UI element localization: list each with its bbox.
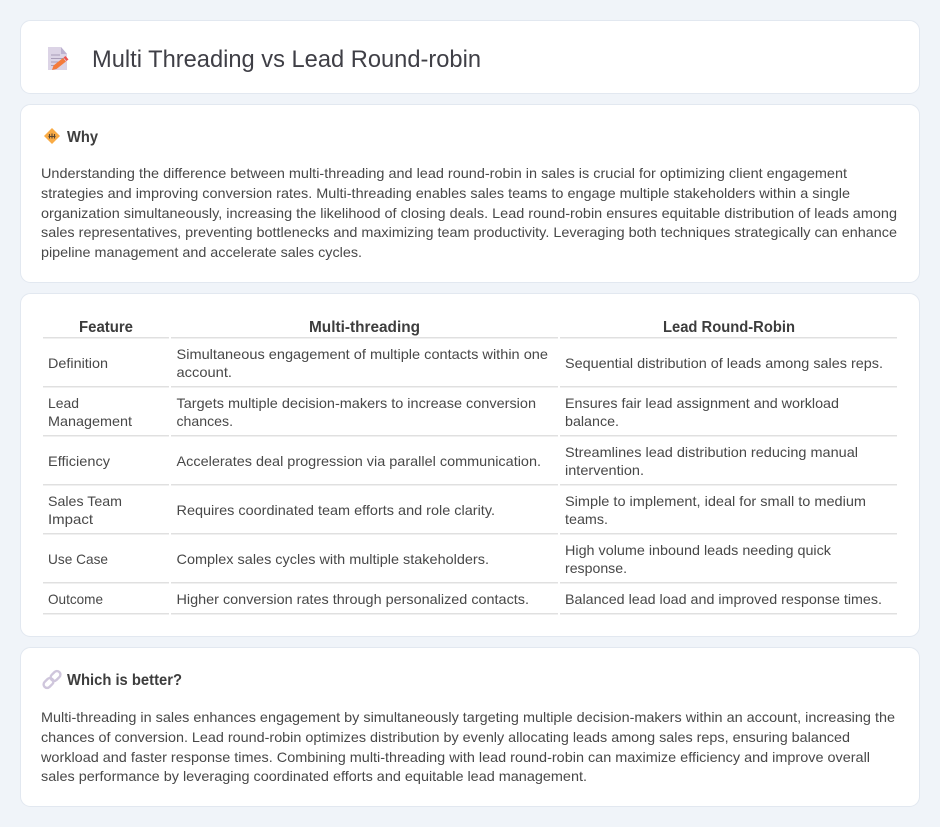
row: lead management: Targets multiple decision-makers to increase conversion <box>176 395 536 411</box>
table header row <box>79 319 795 336</box>
text block: which is better paragraph <box>40 709 895 784</box>
table header row: Lead Round-Robin <box>663 319 795 336</box>
row: sales team impact: Requires coordinated team efforts and role clarity. <box>176 502 495 518</box>
row: definition: Definition <box>48 355 108 371</box>
row: efficiency: Accelerates deal progression via parallel communication. <box>176 453 541 469</box>
row: efficiency: intervention. <box>565 462 644 478</box>
row: use case: Use Case <box>48 551 108 567</box>
row: sales team impact: Impact <box>48 511 93 527</box>
row: use case <box>48 542 832 576</box>
text block: which is better paragraph: sales performance by leveraging coordinated efforts and equitable lead management. <box>41 768 587 784</box>
row: sales team impact: Simple to implement, ideal for small to medium <box>565 493 866 509</box>
row: efficiency <box>48 444 858 478</box>
icon: chain link <box>42 670 62 689</box>
panel: comparison table <box>20 294 920 636</box>
text block: why paragraph <box>41 165 897 260</box>
row: outcome: Higher conversion rates through personalized contacts. <box>176 591 529 607</box>
text block: which is better paragraph: chances of conversion. Lead round-robin optimizes distribution by evenly allocating leads among sales reps, ensuring balanced <box>41 729 850 745</box>
row: definition: Sequential distribution of leads among sales reps. <box>565 355 883 371</box>
row: outcome: Outcome <box>48 591 103 607</box>
text block: why paragraph: strategies and improving conversion rates. Multi-threading enables sales teams to engage multiple stakeholders within a single <box>41 185 850 201</box>
row: lead management: Lead <box>48 395 79 411</box>
row: lead management: Ensures fair lead assignment and workload <box>565 395 839 411</box>
row: sales team impact: Sales Team <box>48 493 122 509</box>
row: lead management: chances. <box>176 413 233 429</box>
row: efficiency: Efficiency <box>48 453 110 469</box>
panel: which is better <box>20 648 920 806</box>
row: efficiency: Streamlines lead distribution reducing manual <box>565 444 858 460</box>
row: lead management: balance. <box>565 413 619 429</box>
text block: why paragraph: organization simultaneously, increasing the likelihood of closing deals. Lead round-robin ensures equitable distribution of leads among <box>41 205 897 221</box>
table header row: Multi-threading <box>309 319 420 336</box>
title: Multi Threading vs Lead Round-robin <box>92 46 481 73</box>
table header row: Feature <box>79 319 133 336</box>
text block: which is better paragraph: workload and faster response times. Combining multi-threading with lead round-robin can maximize efficiency and improve overall <box>40 749 870 765</box>
text block: why paragraph: pipeline management and accelerate sales cycles. <box>41 244 362 260</box>
row: outcome <box>48 591 882 607</box>
row: definition: Simultaneous engagement of multiple contacts within one <box>176 346 548 362</box>
row: sales team impact <box>48 493 866 527</box>
row: use case: Complex sales cycles with multiple stakeholders. <box>176 551 489 567</box>
icon: warning diamond <box>44 128 60 144</box>
text block: why paragraph: Understanding the difference between multi-threading and lead round-robin in sales is crucial for optimizing client engagement <box>41 165 847 181</box>
heading: why: Why <box>67 129 98 146</box>
panel: why <box>20 104 920 282</box>
row: outcome: Balanced lead load and improved response times. <box>565 591 882 607</box>
icon: document with pencil <box>48 47 68 70</box>
row: definition: account. <box>176 364 232 380</box>
heading: which is better: Which is better? <box>67 672 182 689</box>
row: lead management: Management <box>48 413 132 429</box>
row: lead management <box>48 395 839 429</box>
row: use case: High volume inbound leads needing quick <box>565 542 832 558</box>
row: sales team impact: teams. <box>565 511 608 527</box>
row: use case: response. <box>565 560 627 576</box>
text block: which is better paragraph: Multi-threading in sales enhances engagement by simultaneously targeting multiple decision-makers within an account, increasing the <box>41 709 895 725</box>
row: definition <box>48 346 883 380</box>
panel: title card <box>20 20 920 94</box>
text block: why paragraph: sales representatives, preventing bottlenecks and maximizing team productivity. Leveraging both techniques strategically can enhance <box>41 224 897 240</box>
